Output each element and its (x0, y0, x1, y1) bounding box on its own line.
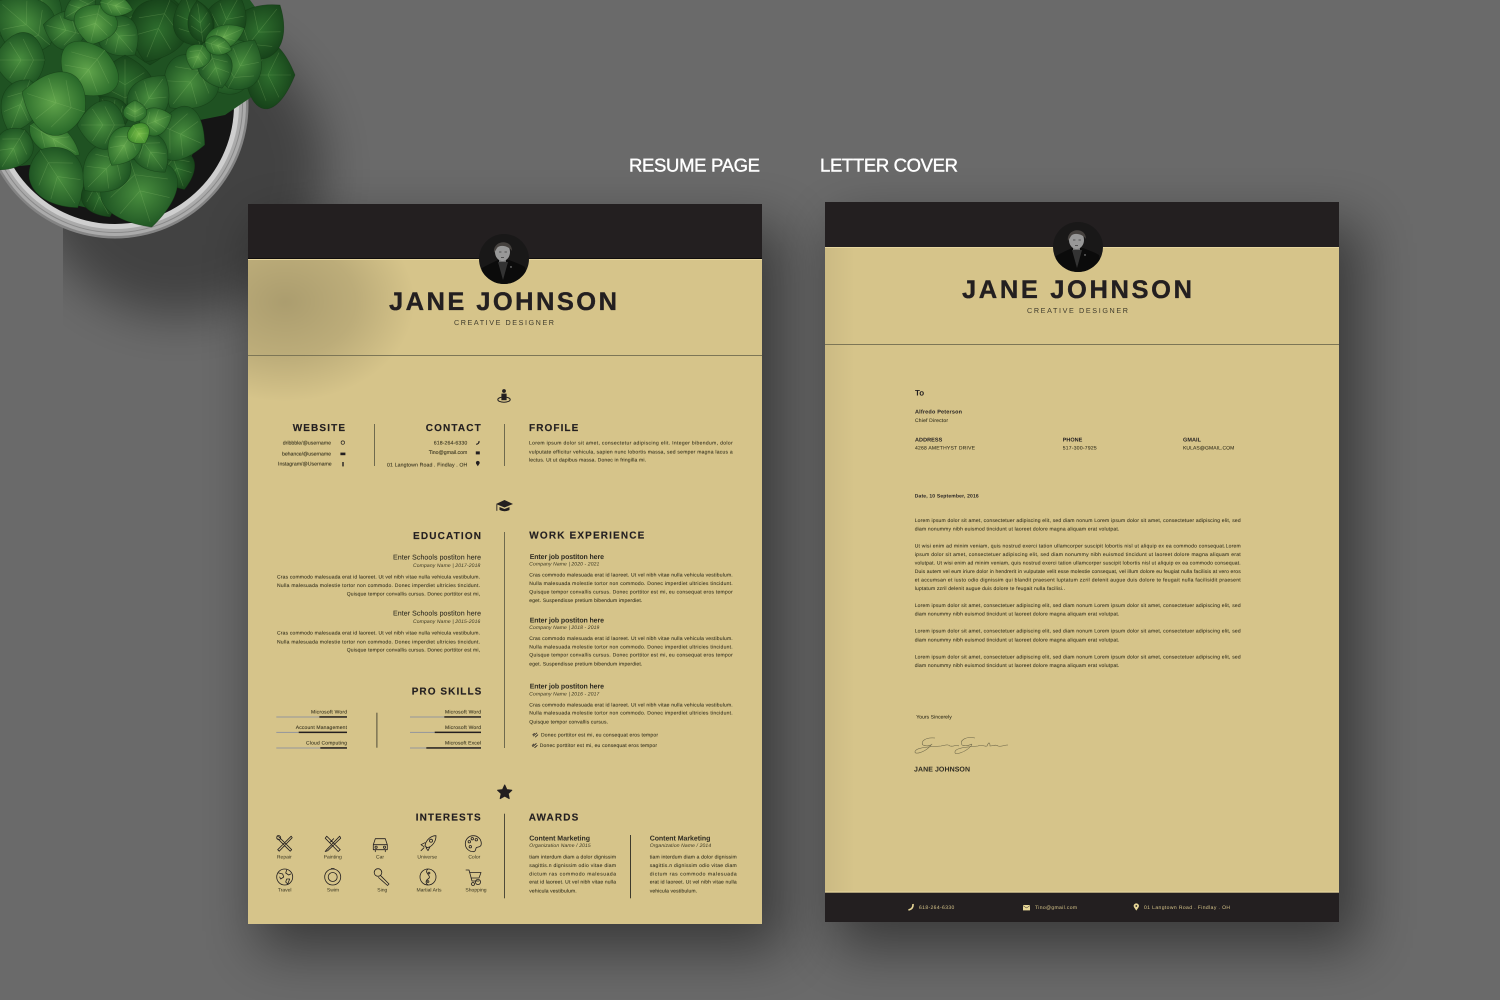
section: website: Instagram/@Username (278, 461, 332, 467)
letter body: ipsum dolor sit amet, consectetuer adipiscing elit, sed diam nonummy nibh euismod tincidunt ut laoreet dolore magna aliquam erat (915, 552, 1241, 558)
icon: graduation cap (496, 500, 513, 511)
section: contact: Tino@gmail.com (429, 450, 467, 456)
section: work experience: Cras commodo malesuada erat id laoreet. Ut vel nibh vitae nulla vehicula vestibulum. (529, 636, 733, 642)
recipient block: ADDRESS (915, 438, 943, 444)
section: work experience: Enter job postiton here (530, 553, 604, 561)
section: education: Enter Schools postiton here (393, 554, 481, 562)
recipient block: To (915, 389, 924, 398)
heading: letter cover: LETTER COVER (820, 155, 958, 176)
section: awards: erat id laoreet. Ut vel nibh vitae nulla (529, 880, 616, 886)
section: education (277, 531, 481, 654)
section: work experience: eget. Suspendisse pretium bibendum imperdiet. (529, 598, 642, 604)
divider (504, 532, 505, 748)
letter body: Lorem ipsum dolor sit amet, consectetuer adipiscing elit, sed diam nonum Lorem ipsum dolor sit amet, consectetuer adipiscing elit, sed (915, 629, 1241, 635)
section: education: Nulla malesuada molestie tortor non commodo. Donec imperdiet ultricies tincidunt. (277, 583, 480, 589)
section: work experience: WORK EXPERIENCE (529, 531, 645, 542)
section: work experience: Company Name | 2016 - 2017 (529, 691, 600, 697)
recipient block (915, 389, 1234, 451)
section: contact: 01 Langtown Road . Findlay . OH (387, 462, 468, 468)
photo: portrait (1053, 222, 1103, 272)
section: awards: erat id laoreet. Ut vel nibh vitae nulla (650, 880, 737, 886)
label: car: Car (376, 854, 384, 860)
section: pro skills: Microsoft Word (445, 725, 481, 731)
section: education: Quisque tempor convallis cursus. Donec porttitor est mi, (347, 592, 480, 598)
page shadow: letter (835, 224, 1361, 948)
icon: potted plant (0, 0, 300, 239)
section: website: dribbble/@username (283, 440, 331, 446)
section: website: WEBSITE (293, 423, 345, 434)
section: education: EDUCATION (413, 531, 481, 542)
section: interests (277, 813, 487, 893)
section: contact: 618-264-6330 (434, 440, 467, 446)
section: pro skills: Microsoft Word (311, 710, 347, 716)
section: profile: vulputate efficitur vehicula, sapien nunc lobortis massa, sed semper magna lacus a (529, 449, 733, 455)
section: work experience: Quisque tempor convallis cursus. Donec porttitor est mi, eu consequat eros tempor (529, 653, 733, 659)
heading: resume page: RESUME PAGE (629, 155, 760, 176)
closing: Yours Sincerely (916, 715, 952, 721)
section: awards: tiam interdum diam a dolor dignissim (650, 854, 737, 860)
section: pro skills: Microsoft Excel (445, 740, 481, 746)
signatory name: JANE JOHNSON (914, 767, 970, 774)
section: awards: Organization Name / 2015 (529, 843, 591, 849)
section: work experience: Quisque tempor convallis cursus. (529, 719, 608, 725)
page shadow: resume (258, 226, 784, 950)
icon: repair (277, 836, 292, 851)
section: awards: Organization Name / 2014 (650, 843, 711, 849)
letter body: Lorem ipsum dolor sit amet, consectetuer adipiscing elit, sed diam nonum Lorem ipsum dolor sit amet, consectetuer adipiscing elit, sed (915, 603, 1241, 609)
section: education: Enter Schools postiton here (393, 610, 481, 618)
section: awards: vehicula vestibulum. (650, 888, 697, 894)
recipient block: Alfredo Peterson (915, 409, 963, 415)
section: website: behance/@username (282, 451, 331, 457)
footer address: 01 Langtown Road . Findlay . OH (1144, 905, 1230, 911)
icon: rocket (421, 836, 436, 851)
section: awards: Content Marketing (650, 834, 710, 842)
section: work experience: Nulla malesuada molestie tortor non commodo. Donec imperdiet ultricies tincidunt. (529, 644, 733, 650)
section: education: Company Name | 2015-2016 (413, 619, 481, 625)
section: work experience: Cras commodo malesuada erat id laoreet. Ut vel nibh vitae nulla vehicula vestibulum. (529, 702, 733, 708)
section: pro skills: Microsoft Word (445, 710, 481, 716)
letter body: luptatum zzril delenit augue duis dolore te feugait nulla facilisi.. (915, 586, 1065, 592)
signature flourish (915, 738, 1008, 754)
section: contact (387, 423, 481, 468)
recipient block: KULAS@GMAIL.COM (1183, 445, 1234, 451)
section: pro skills: Account Management (296, 725, 348, 731)
letter body: Lorem ipsum dolor sit amet, consectetuer adipiscing elit, sed diam nonum Lorem ipsum dolor sit amet, consectetuer adipiscing elit, sed (915, 654, 1241, 660)
icon: star (498, 785, 512, 799)
section: education: Cras commodo malesuada erat id laoreet. Ut vel nibh vitae nulla vehicula vestibulum. (277, 631, 480, 637)
letter body: Lorem ipsum dolor sit amet, consectetuer adipiscing elit, sed diam nonum Lorem ipsum dolor sit amet, consectetuer adipiscing elit, sed (915, 518, 1241, 524)
section: education: Cras commodo malesuada erat id laoreet. Ut vel nibh vitae nulla vehicula vestibulum. (277, 575, 480, 581)
label: painting: Painting (324, 854, 342, 860)
section: profile: lectus. Ut ut dapibus massa. Donec in fringilla mi. (529, 458, 646, 464)
subtitle: CREATIVE DESIGNER (454, 318, 554, 327)
icon: sing (374, 869, 389, 886)
section: awards: dictum ras commodo malesuada (650, 872, 737, 878)
label: repair: Repair (277, 854, 292, 860)
letter body: et accumsan et iusto odio dignissim qui blandit praesent luptatum zzril delenit augue duis dolore te feugait nulla facilisidit praesent (915, 577, 1241, 583)
section: pro skills: Cloud Computing (306, 740, 347, 746)
icon: mail (1023, 905, 1030, 910)
title: name: JANE JOHNSON (389, 288, 617, 316)
recipient block: Chief Director (915, 418, 948, 424)
section: awards (529, 813, 737, 898)
section: work experience: Company Name | 2018 - 2019 (529, 625, 600, 631)
letter body: diam nonummy nibh euismod tincidunt ut laoreet dolore magna aliquam erat volutpat. (915, 526, 1119, 532)
letter body: diam nonummy nibh euismod tincidunt ut laoreet dolore magna aliquam erat volutpat. (915, 637, 1119, 643)
letter body (915, 518, 1241, 669)
section: interests: INTERESTS (416, 813, 481, 824)
section: work experience: Cras commodo malesuada erat id laoreet. Ut vel nibh vitae nulla vehicula vestibulum. (529, 573, 733, 579)
subtitle: CREATIVE DESIGNER (1027, 306, 1128, 315)
section: work experience: Nulla malesuada molestie tortor non commodo. Donec imperdiet ultricies tincidunt. (529, 581, 733, 587)
label: universe: Universe (417, 854, 437, 860)
icon: travel (277, 869, 293, 885)
label: swim: Swim (327, 887, 339, 893)
section: profile: FROFILE (529, 423, 579, 434)
letter body: diam nonummy nibh euismod tincidunt ut laoreet dolore magna aliquam erat volutpat. (915, 663, 1119, 669)
section: work experience: Donec porttitor est mi, eu consequat eros tempor (541, 732, 658, 738)
label: travel: Travel (278, 887, 292, 893)
plant shadow (32, 24, 324, 316)
label: sing: Sing (377, 887, 388, 893)
letter body: diam nonummy nibh euismod tincidunt ut laoreet dolore magna aliquam erat volutpat. (915, 612, 1119, 618)
section: work experience (529, 531, 733, 749)
letter body: Ut wisi enim ad minim veniam, quis nostrud exerci tation ullamcorper suscipit lobortis nisl ut aliquip ex ea commodo consequat.Lorem (915, 543, 1241, 549)
section: awards: sagittis.n dignissim odio vitae diam (529, 863, 616, 869)
panel: resume page (248, 204, 762, 924)
section: work experience: Nulla malesuada molestie tortor non commodo. Donec imperdiet ultricies tincidunt. (529, 711, 733, 717)
section: awards: AWARDS (529, 813, 579, 824)
section: work experience: Company Name | 2020 - 2021 (529, 562, 600, 568)
icon: shopping (466, 870, 481, 886)
footer bar (825, 892, 1339, 922)
icon: martial arts (420, 869, 436, 885)
photo: portrait (479, 234, 529, 284)
recipient block: 4268 AMETHYST DRIVE (915, 445, 976, 451)
footer phone: 618-264-6330 (919, 905, 955, 911)
section: awards: tiam interdum diam a dolor dignissim (529, 854, 616, 860)
label: martial arts: Martial Arts (416, 887, 442, 893)
plant shadow on paper (248, 260, 396, 387)
section: profile: Lorem ipsum dolor sit amet, consectetur adipiscing elit. Integer bibendum, dolor (529, 441, 733, 447)
section: education: Nulla malesuada molestie tortor non commodo. Donec imperdiet ultricies tincidunt. (277, 639, 480, 645)
date: Date, 10 September, 2016 (915, 493, 979, 499)
divider (374, 424, 375, 466)
section: work experience: Quisque tempor convallis cursus. Donec porttitor est mi, eu consequat eros tempor (529, 589, 733, 595)
letter body: Duis autem vel eum iriure dolor in hendrerit in vulputate velit esse molestie consequat, vel illum dolore eu feugiat nulla facilisis at vero eros (915, 569, 1241, 575)
section: work experience: Donec porttitor est mi, eu consequat eros tempor (540, 743, 657, 749)
section: work experience: Enter job postiton here (530, 683, 604, 691)
icon: car (373, 839, 387, 852)
icon: pin (1134, 903, 1139, 911)
icon: phone (908, 904, 913, 910)
icon: palette (465, 836, 481, 852)
icon: swim (325, 868, 341, 885)
recipient block: 517-300-7925 (1063, 445, 1097, 451)
section: education: Company Name | 2017-2018 (413, 563, 481, 569)
section: website (278, 423, 345, 467)
title: name: JANE JOHNSON (962, 276, 1192, 304)
divider (504, 424, 505, 466)
section: awards: Content Marketing (529, 834, 590, 842)
section: work experience: eget. Suspendisse pretium bibendum imperdiet. (529, 661, 642, 667)
section: pro skills: PRO SKILLS (412, 687, 482, 698)
section: awards: vehicula vestibulum. (529, 888, 577, 894)
recipient block: PHONE (1063, 438, 1083, 444)
section: education: Quisque tempor convallis cursus. Donec porttitor est mi, (347, 648, 480, 654)
section: work experience: Enter job postiton here (530, 616, 604, 624)
footer email: Tino@gmail.com (1035, 905, 1077, 911)
section: awards: sagittis.n dignissim odio vitae diam (650, 863, 737, 869)
panel: letter cover (825, 202, 1339, 922)
label: color: Color (468, 854, 481, 860)
divider (504, 814, 505, 898)
section: awards: dictum ras commodo malesuada (529, 872, 616, 878)
label: shopping: Shopping (465, 887, 487, 893)
section: pro skills (276, 687, 482, 749)
letter body: volutpat. Ut wisi enim ad minim veniam, quis nostrud exerci tation ullamcorper suscipit lobortis nisl ut aliquip ex ea commodo consequat. (915, 560, 1241, 566)
recipient block: GMAIL (1183, 438, 1202, 444)
section: profile (529, 423, 733, 464)
icon: person (498, 389, 510, 402)
section: contact: CONTACT (426, 423, 481, 434)
icon: painting (325, 836, 341, 852)
